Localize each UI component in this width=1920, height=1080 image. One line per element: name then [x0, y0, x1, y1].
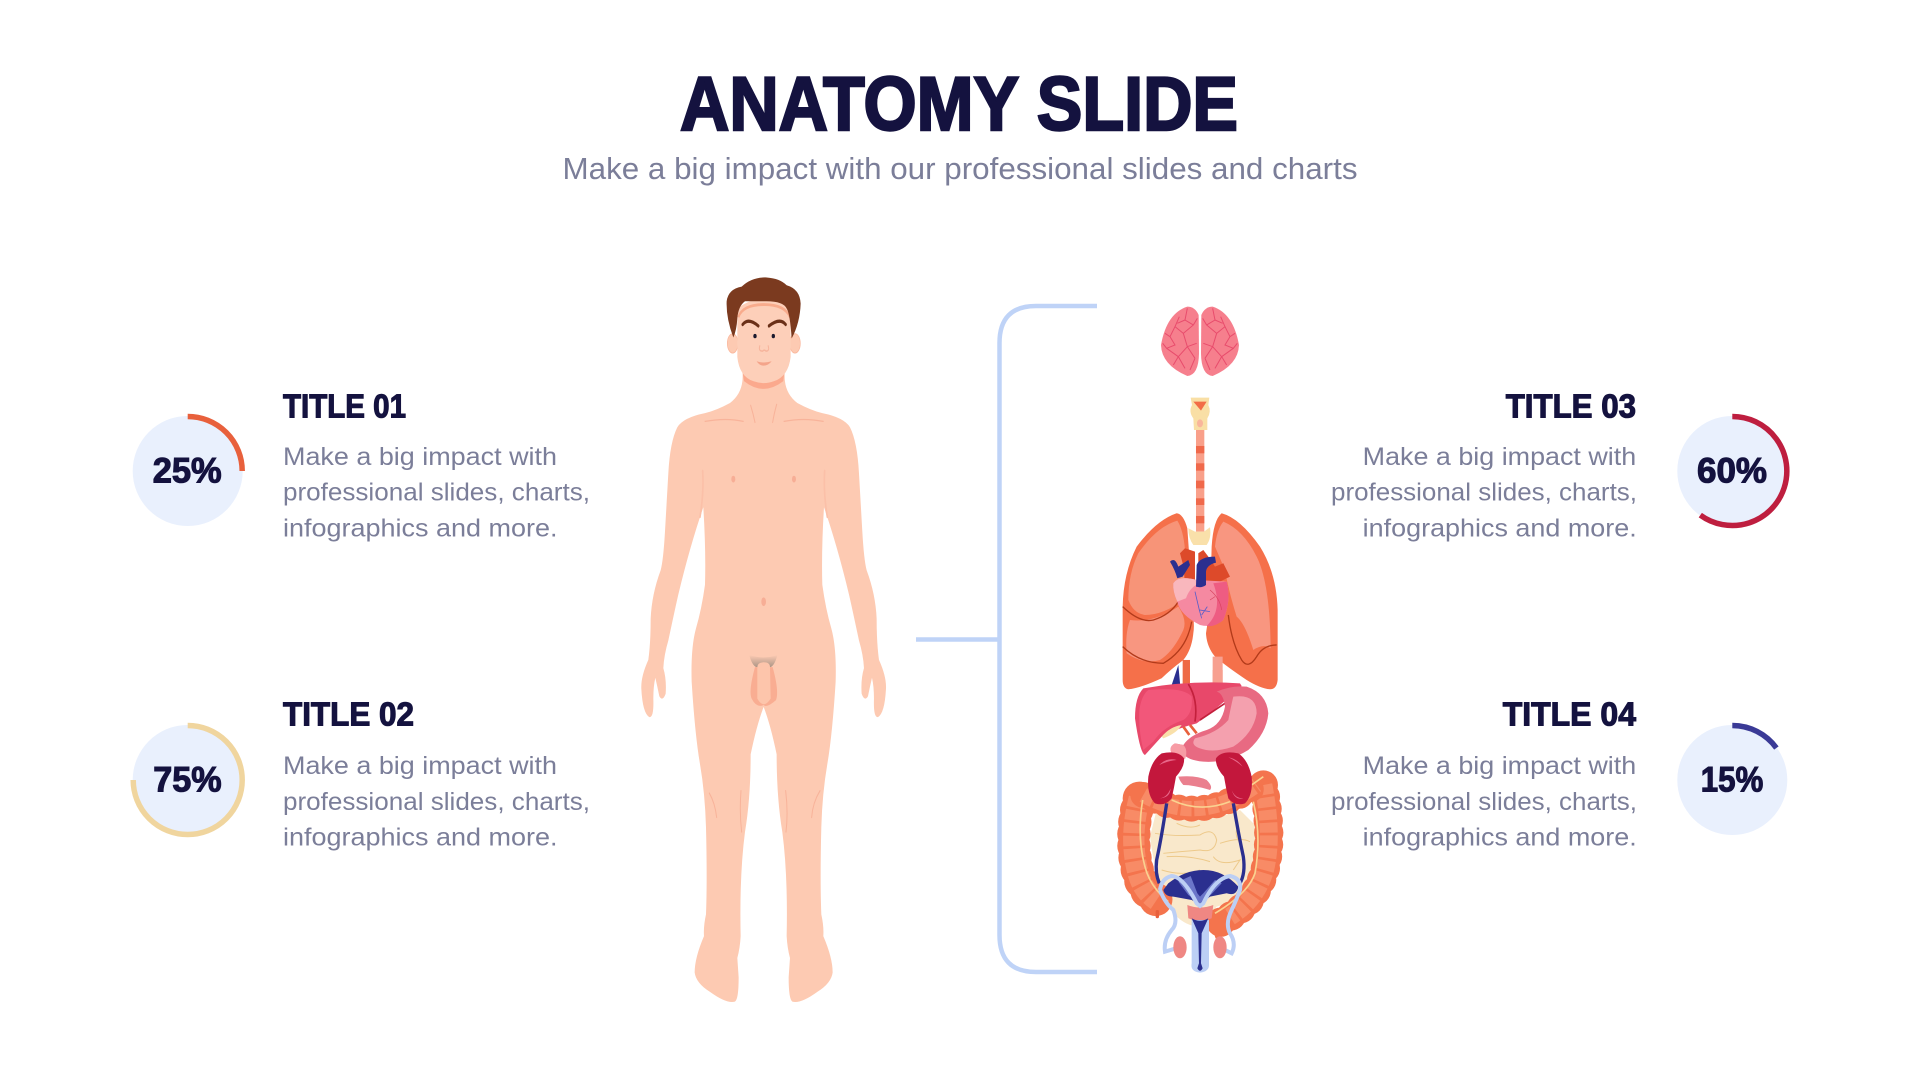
text block: title 01: [283, 388, 590, 543]
urethra: [1191, 918, 1209, 973]
text block: title 01: TITLE 01: [283, 388, 406, 425]
neck shadow: [743, 372, 784, 389]
text block: title 02: professional slides, charts,: [283, 788, 590, 816]
text block: title 02: infographics and more.: [283, 824, 558, 852]
text block: title 02: TITLE 02: [283, 696, 414, 733]
text block: title 04: Make a big impact with: [1363, 752, 1636, 780]
right lung: [1206, 513, 1278, 689]
ears: [727, 334, 800, 353]
chest and navel marks: [731, 476, 796, 606]
vessels below lungs: [1172, 657, 1223, 690]
text block: title 01: professional slides, charts,: [283, 479, 590, 507]
text block: title 01: Make a big impact with: [283, 443, 557, 471]
stomach: [1171, 686, 1268, 762]
heart: [1170, 548, 1230, 626]
bladder: [1163, 870, 1238, 905]
stat ring: 60%: [1677, 416, 1787, 526]
organs: lower body: [1134, 670, 1269, 973]
colon band lines: [1140, 777, 1263, 913]
text block: title 04: professional slides, charts,: [1331, 788, 1637, 816]
subtitle: Make a big impact with our professional slides and charts: [562, 151, 1358, 186]
facial features: [743, 321, 786, 366]
large intestine: [1134, 785, 1269, 927]
transverse colon: [1143, 785, 1257, 809]
larynx: [1190, 398, 1210, 430]
text block: title 04: infographics and more.: [1363, 824, 1637, 852]
trachea: [1196, 430, 1204, 532]
text block: title 03: TITLE 03: [1506, 388, 1636, 425]
face: [737, 299, 791, 383]
body skin creases: [700, 404, 827, 832]
body silhouette: [641, 357, 886, 1002]
organs: upper body: [1123, 307, 1278, 690]
left kidney: [1148, 752, 1184, 804]
liver: [1135, 682, 1242, 755]
title: ANATOMY SLIDE: [680, 62, 1238, 147]
prostate: [1187, 905, 1213, 921]
text block: title 02: [283, 696, 590, 852]
small intestine: [1150, 810, 1258, 927]
vas deferens: [1160, 876, 1240, 953]
stat ring: 25%: 25%: [153, 451, 222, 490]
brain: [1161, 307, 1239, 376]
stat ring: 15%: [1677, 725, 1787, 835]
hair: [727, 277, 801, 339]
stat ring: 25%: [133, 416, 243, 526]
stat ring: 75%: [133, 725, 243, 835]
ureters: [1156, 803, 1244, 883]
testes: [1173, 936, 1227, 958]
text block: title 03: [1331, 388, 1637, 543]
text block: title 03: Make a big impact with: [1363, 443, 1636, 471]
text block: title 03: professional slides, charts,: [1331, 479, 1637, 507]
left lung: [1123, 513, 1194, 689]
right kidney: [1216, 752, 1252, 804]
text block: title 02: Make a big impact with: [283, 752, 557, 780]
text block: title 04: [1331, 696, 1637, 852]
stat ring: 15%: 15%: [1701, 761, 1763, 800]
bronchi: [1188, 527, 1210, 545]
pancreas: [1178, 776, 1211, 790]
stat ring: 60%: 60%: [1697, 451, 1767, 490]
text block: title 03: infographics and more.: [1363, 515, 1637, 543]
pelvic detail: [749, 655, 777, 706]
text block: title 04: TITLE 04: [1503, 696, 1637, 733]
text block: title 01: infographics and more.: [283, 515, 558, 543]
human body figure: [641, 277, 886, 1002]
bracket connector: [916, 306, 1097, 972]
esophagus end: [1213, 670, 1223, 695]
stat ring: 75%: 75%: [153, 761, 222, 800]
